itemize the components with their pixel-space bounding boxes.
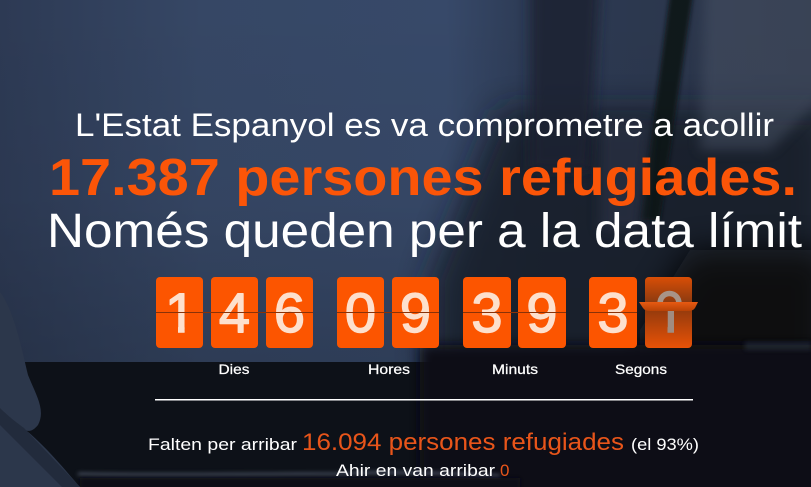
title line 2: highlighted number: 17.387 persones refugiades.: [49, 149, 797, 207]
countdown: minutes: 3: [471, 281, 503, 344]
countdown: hours: [337, 277, 439, 348]
countdown: days: 1: [165, 281, 196, 344]
remaining arrivals text: (el 93%): [631, 435, 699, 454]
countdown: hours: 0: [345, 281, 376, 344]
countdown: days: [156, 277, 313, 348]
countdown: seconds: [589, 277, 698, 348]
countdown: minutes: [463, 277, 566, 348]
hooded figure: [0, 292, 80, 487]
title line 1: L'Estat Espanyol es va comprometre a acollir: [75, 107, 774, 143]
label: seconds: Segons: [615, 361, 667, 377]
yesterday arrivals text: Ahir en van arribar: [336, 461, 495, 480]
flipping digit card: 1: [654, 281, 686, 344]
title line 3: Només queden per a la data límit: [47, 205, 802, 258]
remaining arrivals text: Falten per arribar: [148, 435, 297, 454]
yesterday arrivals text: 0: [500, 461, 509, 480]
countdown: hours: 9: [400, 281, 431, 344]
label: minutes: Minuts: [492, 361, 538, 377]
countdown: minutes: 9: [526, 281, 558, 344]
label: hours: Hores: [368, 361, 410, 377]
remaining arrivals text: 16.094 persones refugiades: [302, 429, 624, 456]
label: days: Dies: [218, 361, 250, 377]
countdown: seconds: 3: [597, 281, 629, 344]
countdown: days: 6: [274, 281, 305, 344]
countdown: days: 4: [219, 281, 250, 344]
